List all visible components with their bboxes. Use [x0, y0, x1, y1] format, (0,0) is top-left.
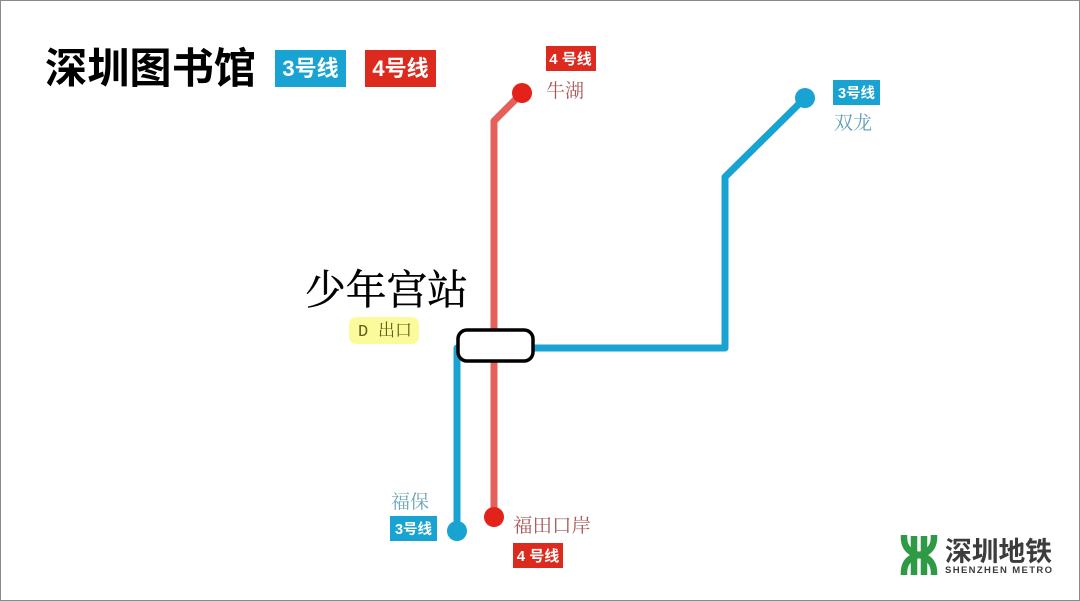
station: 牛湖: 牛湖	[546, 80, 584, 102]
title: 深圳图书馆	[45, 45, 256, 92]
station: 双龙	[795, 80, 880, 134]
interchange station marker	[458, 330, 533, 361]
legend: line 4 badge: 4号线	[372, 56, 429, 81]
logo English name: SHENZHEN METRO	[945, 565, 1052, 576]
line 4 route	[494, 93, 522, 518]
icon: metro mark	[904, 535, 934, 575]
legend: line 3 badge: 3号线	[282, 56, 339, 81]
station: 福田口岸: 福田口岸	[513, 515, 591, 537]
Shenzhen Metro logo	[904, 535, 1052, 576]
station: 福保: 3号线	[395, 520, 433, 538]
station: 福田口岸	[484, 507, 591, 568]
station: 福保	[390, 491, 467, 541]
exit label: D	[358, 323, 368, 342]
logo wordmark: 深圳地铁	[945, 537, 1052, 567]
station: 牛湖: 4 号线	[549, 50, 592, 68]
exit label: 出口	[378, 321, 412, 340]
station: 牛湖	[512, 46, 596, 103]
station: 福田口岸: 4 号线	[517, 547, 559, 565]
legend: line 4 badge	[365, 50, 436, 87]
station: 双龙: 3号线	[838, 84, 876, 102]
station: 双龙: 双龙	[834, 112, 872, 134]
station: 福保: 福保	[391, 491, 429, 513]
exit label	[349, 317, 419, 344]
line 3 route	[457, 98, 805, 531]
legend: line 3 badge	[275, 50, 346, 87]
station name: 少年宫站	[305, 267, 468, 313]
